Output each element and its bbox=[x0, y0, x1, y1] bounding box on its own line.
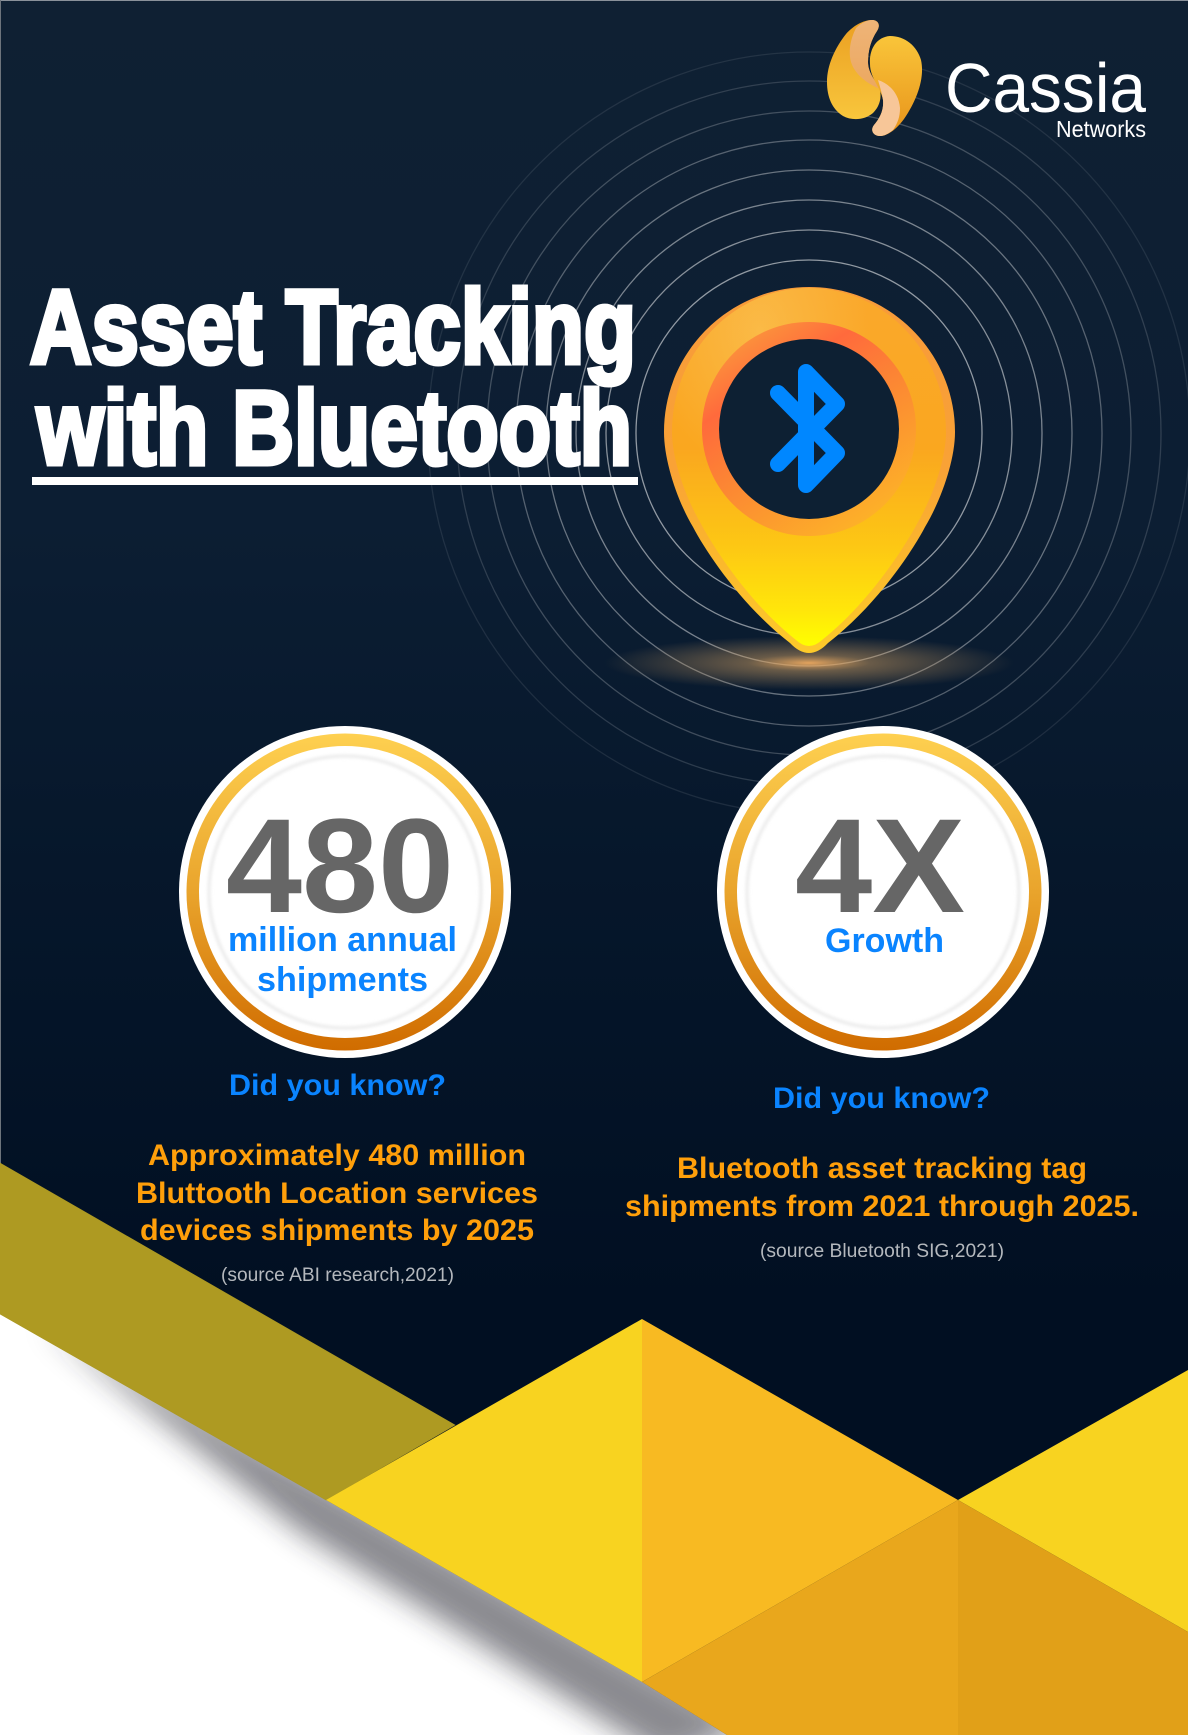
icon: location pin with Bluetooth bbox=[664, 287, 955, 653]
geometric facets bbox=[0, 1163, 1188, 1735]
big number: 4X bbox=[795, 792, 965, 941]
heading: did you know: Did you know? bbox=[773, 1082, 990, 1115]
title: Asset Tracking bbox=[30, 269, 636, 386]
concentric signal rings bbox=[428, 52, 1188, 814]
right fact text bbox=[625, 1082, 1139, 1262]
title: with Bluetooth bbox=[36, 370, 632, 487]
stat circle: 4X bbox=[717, 726, 1049, 1058]
left fact text bbox=[136, 1069, 538, 1286]
location pin glow bbox=[604, 636, 1014, 690]
icon: logo mark bbox=[827, 20, 922, 136]
white lower-left corner with shadow bbox=[0, 1314, 750, 1735]
fact: Bluttooth Location services bbox=[136, 1177, 538, 1210]
big number: 480 bbox=[226, 792, 454, 941]
heading: did you know: Did you know? bbox=[229, 1069, 446, 1102]
fact bbox=[136, 1139, 538, 1247]
fact: devices shipments by 2025 bbox=[140, 1214, 534, 1247]
icon: Bluetooth rune bbox=[778, 372, 837, 485]
fact: Bluetooth asset tracking tag bbox=[677, 1152, 1087, 1185]
source: (source ABI research,2021) bbox=[221, 1265, 454, 1286]
logo wordmark: Cassia bbox=[945, 49, 1146, 127]
fact bbox=[625, 1152, 1139, 1223]
title bbox=[30, 269, 638, 487]
stat circle: 480 bbox=[179, 726, 511, 1058]
logo: Cassia Networks bbox=[827, 20, 1146, 142]
fact: shipments from 2021 through 2025. bbox=[625, 1190, 1139, 1223]
stat circle: 480: shipments bbox=[257, 961, 428, 999]
stat label: Growth bbox=[825, 922, 944, 960]
stat label: million annual bbox=[228, 921, 457, 959]
fact: Approximately 480 million bbox=[148, 1139, 526, 1172]
source: (source Bluetooth SIG,2021) bbox=[760, 1241, 1004, 1262]
logo subtext: Networks bbox=[1056, 116, 1146, 142]
